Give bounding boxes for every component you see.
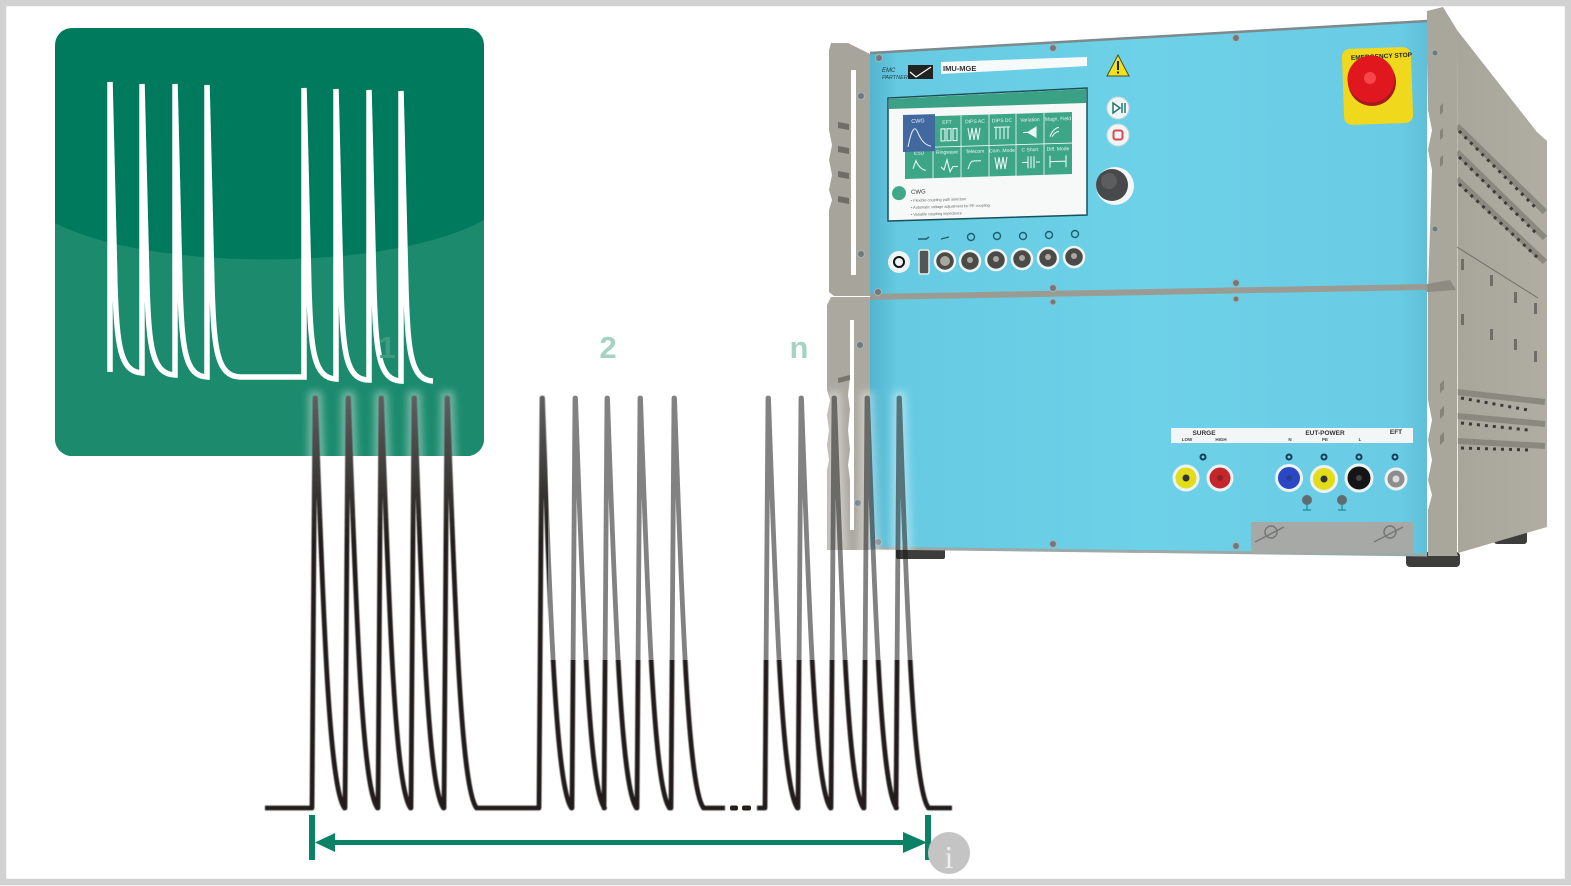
icon: info badge	[928, 832, 970, 875]
function tile grid: ESD	[914, 150, 925, 157]
front connector icons	[918, 230, 1078, 240]
terminal label strip: PE	[1322, 437, 1328, 442]
left handle bottom	[827, 297, 870, 550]
function tile grid: Ringwave	[936, 149, 958, 156]
USB port	[919, 250, 929, 274]
logo: EMC	[882, 68, 896, 74]
selected CWG tile	[903, 114, 935, 152]
model name strip	[941, 57, 1087, 74]
device: surge test generator	[827, 7, 1547, 567]
waveform glow	[303, 386, 916, 550]
function tile grid: DIPS DC	[992, 118, 1013, 124]
icon: warning triangle	[1107, 55, 1129, 76]
faded upper traces	[548, 396, 912, 660]
function tile grid: Com. Mode	[989, 148, 1015, 155]
ellipsis dots	[730, 806, 751, 810]
CWG description: • Variable coupling impedance	[911, 211, 962, 217]
function tile grid	[905, 112, 1072, 179]
selected CWG tile: CWG	[911, 118, 925, 125]
device feet	[896, 530, 1527, 567]
left handle top	[829, 43, 870, 296]
burst number labels: 2	[599, 330, 617, 365]
CWG description	[892, 183, 990, 217]
emergency stop	[1342, 47, 1413, 125]
terminal label strip: SURGE	[1192, 430, 1216, 437]
terminal label strip: L	[1359, 437, 1362, 442]
device side panel	[1457, 30, 1547, 553]
function tile grid: Variation	[1020, 117, 1040, 124]
burst number labels: n	[790, 330, 808, 365]
function tile grid: Diff. Mode	[1047, 146, 1070, 153]
logo	[882, 65, 933, 81]
burst pulse traces	[265, 398, 952, 808]
right rack post	[1427, 7, 1458, 556]
terminal label strip: EUT-POWER	[1305, 430, 1345, 437]
terminal label strip: N	[1288, 437, 1292, 442]
logo: PARTNER	[882, 75, 908, 81]
rotary knob	[1096, 167, 1134, 205]
function tile grid: EFT	[942, 120, 952, 126]
device front panel	[870, 21, 1427, 555]
icon: white burst waveform	[110, 82, 433, 381]
indicator LEDs	[1200, 454, 1398, 460]
terminal label strip: HIGH	[1215, 437, 1227, 442]
panel screws	[854, 34, 1438, 550]
burst number labels: 1	[378, 330, 396, 365]
terminal label strip: EFT	[1390, 429, 1402, 436]
icon: info badge: i	[945, 839, 954, 875]
function tile grid: C Short	[1022, 147, 1039, 154]
terminal label strip: LOW	[1182, 437, 1193, 442]
cover plate	[1251, 522, 1413, 553]
terminal label strip	[1171, 428, 1413, 443]
model name strip: IMU-MGE	[943, 64, 976, 73]
green waveform icon panel	[55, 28, 484, 456]
power button	[888, 251, 910, 273]
duration arrow	[309, 815, 931, 860]
play and stop buttons	[1107, 97, 1129, 146]
round and BNC connectors	[935, 247, 1084, 271]
banana sockets	[1174, 465, 1406, 492]
CWG description: CWG	[911, 189, 926, 196]
ground studs	[1302, 495, 1347, 510]
CWG description: • Automatic voltage adjustment for PE coupling	[911, 203, 990, 210]
burst number labels	[378, 330, 808, 365]
CWG description: • Flexible coupling path selection	[911, 197, 966, 203]
function tile grid: Magn. Field	[1045, 116, 1071, 123]
function tile grid: DIPS AC	[965, 119, 985, 125]
burst waveform chart	[265, 398, 952, 810]
touchscreen	[888, 88, 1087, 221]
emergency stop: EMERGENCY STOP	[1351, 52, 1413, 62]
function tile grid: Telecom	[966, 149, 984, 155]
